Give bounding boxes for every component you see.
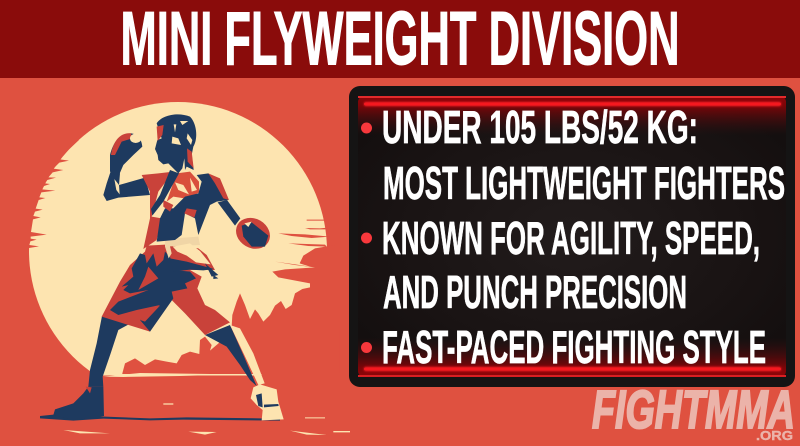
front glove shine: [244, 222, 252, 227]
raised arm: [103, 168, 150, 201]
ground band: [0, 376, 345, 446]
front shoe shadow: [256, 393, 279, 407]
ground highlights: [63, 403, 350, 435]
tatter: [173, 243, 211, 264]
waistband: [165, 237, 200, 258]
torso red side: [142, 172, 173, 249]
left sun streaks: [20, 140, 79, 248]
chest patches: [163, 200, 197, 218]
chest strap shadow: [151, 170, 179, 216]
front leg: [205, 325, 257, 386]
ground shadow: [40, 415, 280, 421]
logo suffix: .ORG: [756, 428, 793, 443]
bullet 1: [361, 101, 785, 209]
raised glove: [110, 133, 142, 177]
tatter shadows: [205, 263, 218, 279]
raised glove shine: [130, 134, 141, 143]
right skyline and clouds upper: [228, 220, 335, 330]
raised arm highlight: [114, 179, 120, 194]
torso: [157, 173, 228, 242]
shorts shadows: [110, 252, 196, 332]
raised glove red: [111, 133, 132, 155]
header banner: [0, 0, 800, 82]
neck and head: [155, 114, 196, 173]
back leg: [88, 316, 137, 387]
neon bar bottom: [364, 367, 781, 371]
front glove: [230, 212, 276, 255]
bullet 3: [361, 321, 766, 373]
front arm: [218, 200, 240, 226]
shorts: [102, 237, 230, 335]
shoulder red: [208, 173, 229, 200]
bullet 2 text: [382, 212, 760, 318]
face highlight: [157, 125, 164, 141]
neck streak: [187, 148, 194, 168]
info panel: [349, 86, 795, 387]
bullet 2: [361, 212, 760, 318]
sun disc: [29, 102, 327, 400]
chest highlights: [175, 178, 197, 194]
skyline lower: [122, 330, 340, 374]
bullet 1 text: [382, 101, 785, 209]
lower legs and shoes: [53, 316, 284, 420]
shorts fold: [138, 267, 160, 322]
back shoe lace: [86, 387, 92, 393]
shorts base: [102, 244, 230, 335]
horizon highlight: [103, 373, 237, 377]
neon bar top: [364, 102, 781, 106]
front leg highlight: [230, 325, 265, 385]
front glove shadow: [242, 222, 268, 247]
shorts right shadow: [170, 258, 214, 272]
upper body: [103, 114, 276, 255]
illustration: boxer in front of the sun: [0, 102, 350, 446]
hair highlights: [172, 121, 192, 145]
back shoe: [53, 387, 104, 420]
chest: [167, 172, 199, 202]
front shoe: [251, 384, 284, 420]
